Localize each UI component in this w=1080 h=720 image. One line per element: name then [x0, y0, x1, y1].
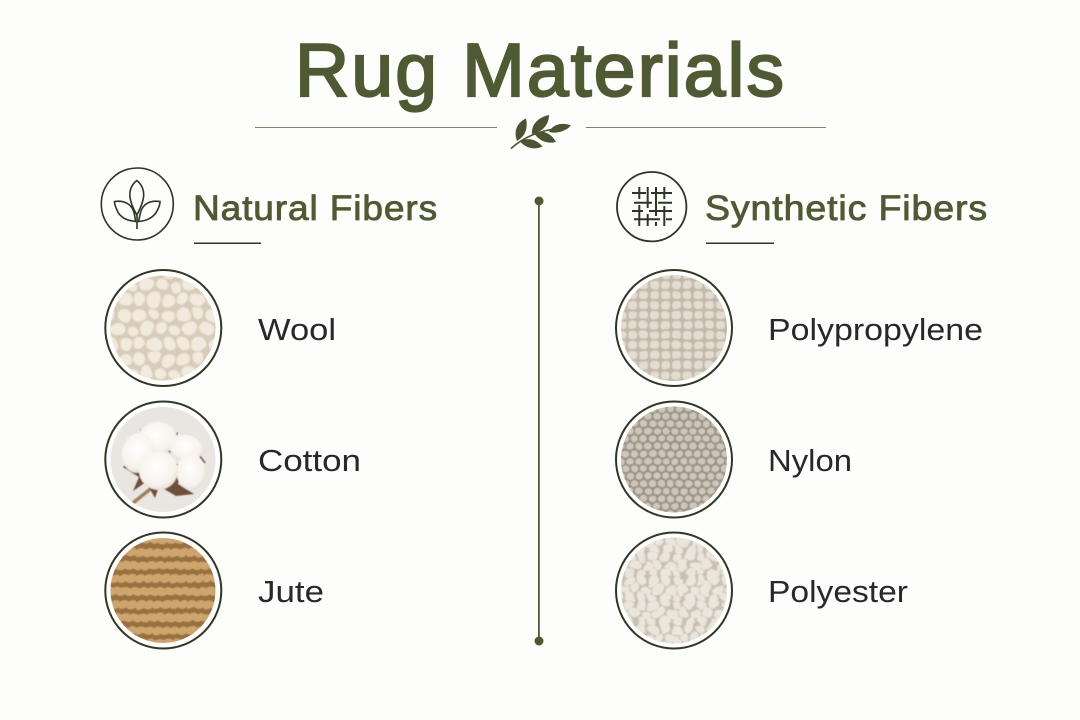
material: polyester — [612, 528, 908, 654]
material: jute — [100, 528, 324, 654]
icon: plant in circle — [101, 168, 173, 240]
heading underline — [194, 242, 261, 244]
title ornament: rules and leaf sprig — [255, 115, 826, 148]
icon: leaf sprig — [511, 115, 571, 148]
icon: woven grid in circle — [617, 172, 686, 241]
material: wool: Wool — [258, 312, 336, 347]
center divider — [534, 196, 544, 646]
material: polypropylene — [612, 265, 983, 391]
title: Rug Materials — [295, 28, 784, 112]
material: polypropylene: Polypropylene — [768, 312, 983, 347]
material: wool — [100, 265, 336, 391]
panel: natural fibers — [100, 168, 438, 654]
material: polyester: Polyester — [768, 574, 908, 609]
material: cotton: Cotton — [258, 443, 361, 478]
heading: Synthetic Fibers: Synthetic Fibers — [705, 189, 988, 228]
material: jute: Jute — [258, 574, 324, 609]
material: nylon: Nylon — [768, 443, 852, 478]
material: nylon — [612, 397, 852, 523]
heading: Natural Fibers: Natural Fibers — [193, 189, 438, 228]
material: cotton — [105, 402, 361, 518]
panel: synthetic fibers — [612, 172, 988, 654]
heading underline — [706, 242, 774, 244]
